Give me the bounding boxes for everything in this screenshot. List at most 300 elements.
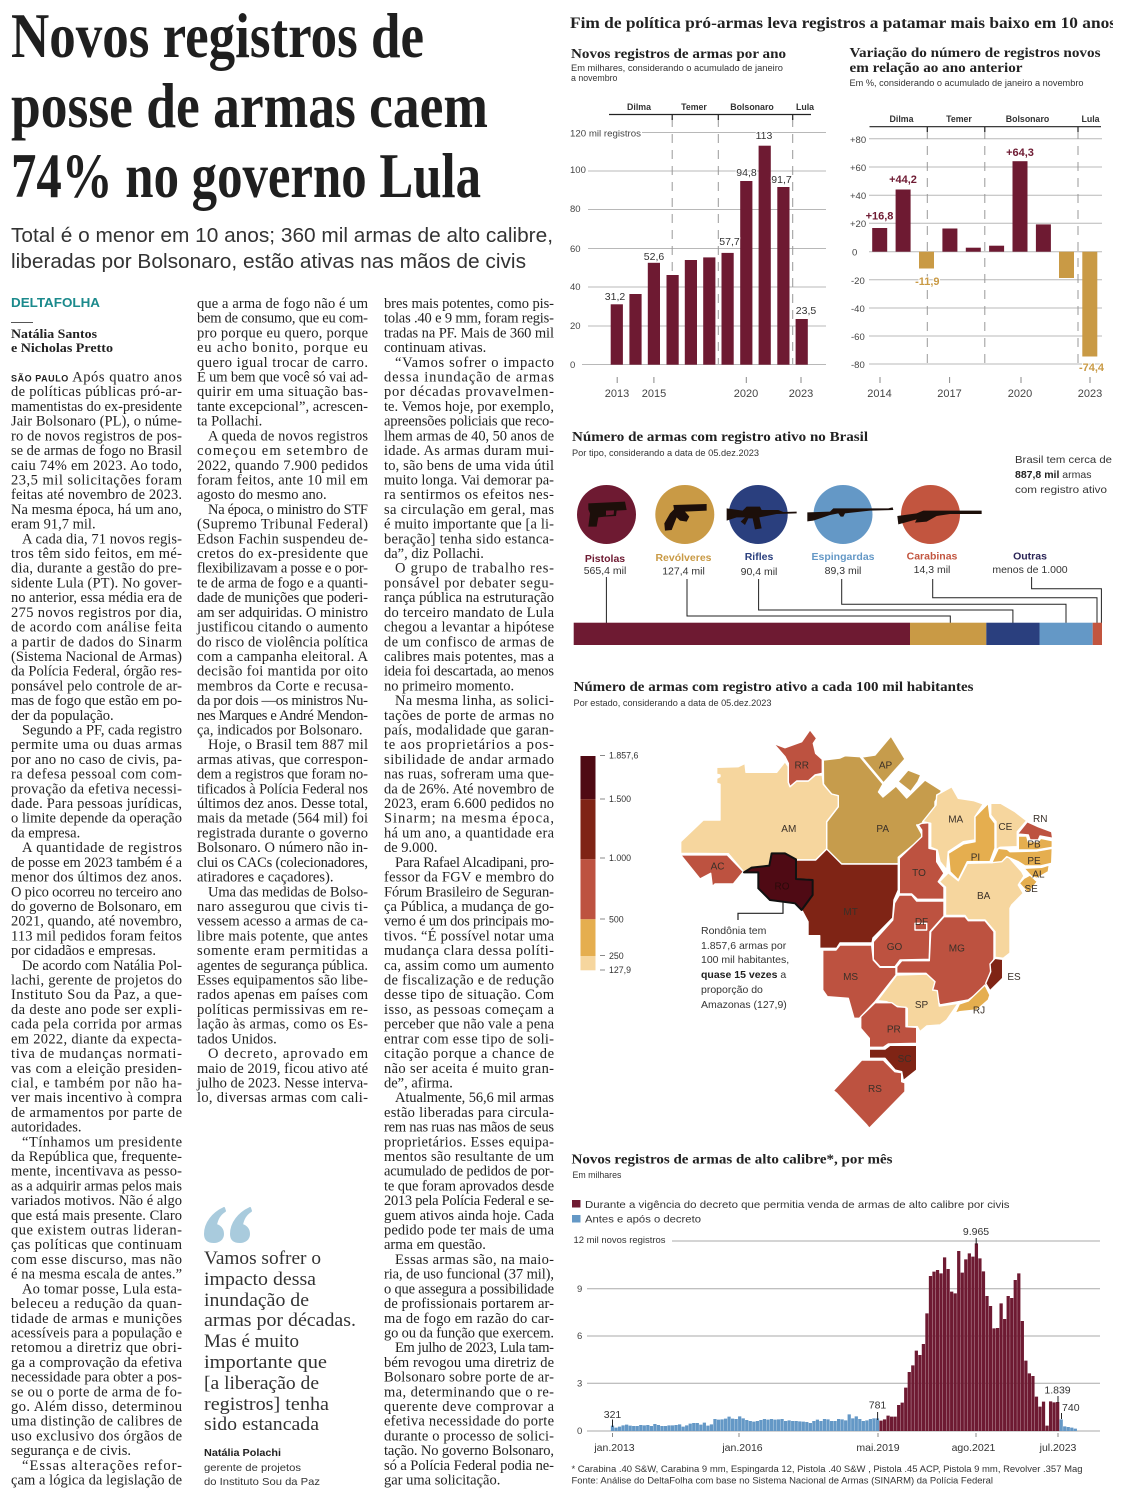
chart: yearly variation: -60 bbox=[851, 332, 865, 343]
article text: column 3: proprietários. Esses equipa- bbox=[384, 1134, 554, 1150]
article text: column 1: der da população. bbox=[11, 708, 114, 724]
panel: high-caliber registrations per month: 3 bbox=[577, 1378, 582, 1390]
article text: column 2: Esses equipamentos são libe- bbox=[197, 972, 368, 988]
article text: column 2: ça, indicados por Bolsonaro. bbox=[197, 722, 363, 738]
article text: column 1: que existem outras lideran- bbox=[11, 1222, 182, 1238]
article text: column 1: retomou a diretriz que obri- bbox=[11, 1340, 182, 1356]
legend bbox=[572, 1199, 1010, 1226]
bars: yearly registrations bbox=[611, 146, 808, 365]
article text: column 1: mas de fogo que estão em po- bbox=[11, 693, 182, 709]
icon: rifle bbox=[727, 485, 797, 544]
state labels: AP bbox=[879, 760, 892, 772]
article text: column 3: O grupo de trabalho res- bbox=[395, 561, 554, 577]
article text: column 2: bem de consumo, que eu com- bbox=[197, 311, 368, 327]
state labels: BA bbox=[977, 891, 991, 902]
article text: column 1: em 2022, diante da expecta- bbox=[11, 1031, 182, 1047]
callout: total guns: 887,8 mil armas bbox=[1015, 469, 1091, 481]
color scale legend: 500 bbox=[609, 914, 624, 924]
article text: column 1: por ano no caso de civis, pa- bbox=[11, 752, 182, 768]
color scale legend: 1.500 bbox=[609, 794, 631, 804]
panel: high-caliber registrations per month: 1.839 bbox=[1044, 1384, 1071, 1396]
subheadline: liberadas por Bolsonaro, estão ativas nas mãos de civis bbox=[11, 251, 526, 273]
article text: column 3: muito longa. Vai demorar pa- bbox=[384, 472, 554, 488]
article text: column 2: decisão foi mantida por oito bbox=[197, 664, 368, 680]
state: CE bbox=[991, 803, 1027, 850]
article text: column 3: isso, as pessoas começam a bbox=[384, 1002, 555, 1018]
chart: new registrations per year: 23,5 bbox=[796, 305, 816, 317]
byline bbox=[11, 322, 113, 355]
article text: column 1: sidente Lula (PT). No gover- bbox=[11, 575, 182, 591]
state: TO bbox=[899, 823, 944, 899]
article text: column 1: De acordo com Natália Pol- bbox=[22, 958, 182, 974]
panel: high-caliber registrations per month: 0 bbox=[577, 1426, 582, 1437]
panel: guns per 100k inhabitants by state: Por estado, considerando a data de 05.dez.2023 bbox=[574, 698, 772, 708]
article text: column 3: idade. As armas duram mui- bbox=[384, 443, 554, 459]
map of Brazil bbox=[681, 730, 1053, 1128]
article text: column 3: calibres mais potentes, mas a bbox=[384, 649, 555, 665]
article text: column 3: mudança clara dessa políti- bbox=[384, 943, 554, 959]
article text: column 2: 2022, quando 7.900 pedidos bbox=[197, 458, 368, 474]
article text: column 3: não ser aceita é muito gran- bbox=[384, 1061, 554, 1077]
section tag: Deltafolha: DELTAFOLHA bbox=[11, 295, 101, 310]
chart: new registrations per year: 52,6 bbox=[644, 251, 664, 263]
chart: yearly variation: Dilma bbox=[890, 114, 914, 124]
state labels: RJ bbox=[973, 1006, 985, 1016]
article text: column 2: quero igual trocar de carro. bbox=[197, 355, 368, 371]
article text: column 2: te de arma de fogo e a quanti- bbox=[197, 575, 368, 591]
article text: column 3: Atualmente, 56,6 mil armas bbox=[395, 1090, 554, 1106]
chart: yearly variation: -40 bbox=[851, 304, 865, 315]
article text: column 2: eu acho bonito, porque eu bbox=[197, 340, 368, 356]
state: RO highlighted bbox=[744, 853, 813, 910]
callout: total guns bbox=[1015, 454, 1112, 496]
article text: column 1: mamentistas do ex-presidente bbox=[11, 399, 182, 415]
chart: yearly variation: -80 bbox=[851, 360, 865, 371]
chart: new registrations per year: 2013 bbox=[605, 388, 629, 400]
article text: column 2: dem a registros que foram no- bbox=[197, 767, 368, 783]
article text: column 1: caiu 74% em 2023. Ao todo, bbox=[11, 458, 182, 474]
article text: column 1: ças políticas que continuam bbox=[11, 1237, 183, 1253]
article text: column 1: beleceu a redução da quan- bbox=[11, 1296, 182, 1312]
article text: column 3: to, são bens de uma vida útil bbox=[384, 458, 554, 474]
article text: column 3: estão liberadas para circula- bbox=[384, 1105, 554, 1121]
chart: new registrations per year: Em milhares, considerando o acumulado de janeiro bbox=[571, 63, 783, 73]
state labels: AL bbox=[1032, 870, 1045, 880]
article text: column 1: Jair Bolsonaro (PL), o núme- bbox=[11, 414, 182, 430]
article text: column 3: chegou a levantar a hipótese bbox=[384, 620, 554, 636]
chart: new registrations per year: 113 bbox=[756, 130, 773, 142]
panel: high-caliber registrations per month: Novos registros de armas de alto calibre*, por mês bbox=[572, 1152, 892, 1166]
article text: column 1: Na mesma época, há um ano, bbox=[11, 502, 182, 518]
article text: column 1: se ou o porte de arma de fo- bbox=[11, 1384, 182, 1400]
panel: high-caliber registrations per month bbox=[572, 1152, 1100, 1486]
article text: column 3: arma em questão. bbox=[384, 1237, 486, 1253]
pull quote: sido estancada bbox=[204, 1415, 319, 1435]
article text: column 1: de políticas públicas pró-ar- bbox=[11, 384, 182, 400]
state: RS bbox=[833, 1060, 905, 1128]
article text: column 1: çam a lógica da legislação de bbox=[11, 1473, 182, 1489]
article text: column 2: Uma das medidas de Bolso- bbox=[208, 884, 368, 900]
color scale legend bbox=[580, 750, 638, 975]
article text: column 1: da Polícia Federal, órgão res- bbox=[11, 664, 182, 680]
article text: column 3: gar uma solicitação. bbox=[384, 1473, 500, 1489]
state labels: AM bbox=[781, 824, 796, 835]
article text: column 2: libre mais potente, que antes bbox=[197, 928, 368, 944]
article text: column 2: tificados à Polícia Federal nos bbox=[197, 781, 368, 797]
article text: column 3: desse tipo de situação. Com bbox=[384, 987, 555, 1003]
state labels: PE bbox=[1027, 856, 1041, 867]
state labels: AC bbox=[711, 862, 725, 872]
article text: column 2: atiradores e caçadores). bbox=[197, 870, 333, 886]
article text: column 3: de profissionais portarem ar- bbox=[384, 1296, 554, 1312]
chart: yearly variation: 2020 bbox=[1008, 388, 1032, 400]
panel: active guns by type: 89,3 mil bbox=[825, 565, 861, 577]
panel: active guns by type: 90,4 mil bbox=[741, 566, 777, 578]
article text: column 3: ça Pública, a mudança de go- bbox=[384, 899, 554, 915]
article text: column 3: Em julho de 2023, Lula tam- bbox=[395, 1340, 554, 1356]
chart: new registrations per year: 91,7 bbox=[771, 174, 792, 186]
panel: high-caliber registrations per month: jan.2016 bbox=[721, 1442, 763, 1454]
color scale legend: 1.000 bbox=[609, 853, 631, 863]
article text: column 1: Segundo a PF, cada registro bbox=[22, 722, 182, 738]
article text: column 2: agosto do mesmo ano. bbox=[197, 487, 327, 503]
article text: column 2: nes Marques e André Mendon- bbox=[197, 708, 368, 724]
article text: column 2: membros da Corte e recusa- bbox=[197, 678, 368, 694]
state: DF bbox=[915, 923, 927, 930]
byline: e Nicholas Pretto bbox=[11, 340, 113, 355]
article text: column 1: acessíveis para a população e bbox=[11, 1326, 182, 1342]
article text: column 1: tiva de mudanças normati- bbox=[11, 1046, 182, 1062]
article text: column 2: do risco de violência política bbox=[197, 634, 369, 650]
state labels: CE bbox=[998, 822, 1013, 833]
article text: column 2: naro assegurou que civis ti- bbox=[197, 899, 368, 915]
icon: carbine bbox=[897, 485, 982, 544]
state: ES bbox=[986, 958, 1003, 991]
article text: column 3: te aos proprietários a pos- bbox=[384, 737, 554, 753]
state labels: MS bbox=[843, 972, 858, 983]
panel: high-caliber registrations per month: 781 bbox=[869, 1400, 886, 1412]
article text: column 1: 23,5 mil solicitações foram bbox=[11, 472, 183, 488]
chart: new registrations per year: Lula bbox=[796, 102, 814, 112]
state labels: RR bbox=[794, 760, 809, 772]
chart: yearly variation: +80 bbox=[850, 135, 866, 146]
chart: new registrations per year: Dilma bbox=[627, 102, 651, 112]
article text: column 1: 2021, quando, até novembro, bbox=[11, 914, 182, 930]
article text: column 3: querente deve comprovar a bbox=[384, 1399, 555, 1415]
chart: yearly variation: Bolsonaro bbox=[1006, 114, 1050, 124]
callout: Rondônia: Rondônia tem bbox=[701, 925, 767, 937]
main headline: Novos registros de bbox=[11, 0, 424, 71]
article text: column 2: É um bem que você só vai ad- bbox=[197, 368, 368, 386]
article text: column 2: (Supremo Tribunal Federal) bbox=[197, 517, 368, 533]
article text: column 3: nas ruas, sofreram uma que- bbox=[384, 767, 554, 783]
panel: guns per 100k inhabitants by state bbox=[574, 679, 1053, 1128]
callout: Rondônia bbox=[701, 902, 789, 1011]
chart: new registrations per year: 2020 bbox=[734, 388, 758, 400]
article text: column 1: a partir de dados do Sinarm bbox=[11, 634, 183, 650]
panel: high-caliber registrations per month: mai.2019 bbox=[856, 1442, 900, 1454]
article text: column 1: necessidade para obter a pos- bbox=[11, 1370, 182, 1386]
article text: column 1: do governo de Bolsonaro, em bbox=[11, 899, 183, 915]
article text: column 2: da por dois —os ministros Nu- bbox=[197, 693, 368, 709]
article text: column 2: Bolsonaro. O número não in- bbox=[197, 840, 368, 856]
callout: total guns: com registro ativo bbox=[1015, 484, 1107, 496]
article text: column 2: quirir em uma situação bas- bbox=[197, 384, 368, 400]
legend: Durante a vigência do decreto que permitia venda de armas de alto calibre por civis bbox=[585, 1199, 1010, 1211]
chart: new registrations per year: 40 bbox=[570, 282, 581, 293]
article text: column 3: pedido pode ter mais de uma bbox=[384, 1222, 555, 1238]
article text: column 3: de fiscalização e de redução bbox=[384, 972, 554, 988]
chart: yearly variation bbox=[850, 45, 1105, 400]
article text: column 2: cretos do ex-presidente que bbox=[197, 546, 368, 562]
island of Marajó bbox=[898, 770, 921, 792]
article text: column 2: rados apenas em países com bbox=[197, 987, 369, 1003]
state: PI bbox=[948, 803, 995, 880]
article text: column 2: com a campanha eleitoral. A bbox=[197, 649, 369, 665]
article text: column 2: tados Unidos. bbox=[197, 1031, 277, 1047]
article text: column 3: só a Polícia Federal podia ne- bbox=[384, 1458, 554, 1474]
article text: column 2: mais da metade (564 mil) foi bbox=[197, 811, 368, 827]
panel: high-caliber registrations per month: 321 bbox=[604, 1409, 621, 1421]
article text: column 1: O pico ocorreu no terceiro ano bbox=[11, 884, 182, 900]
panel: high-caliber registrations per month: 12 mil novos registros bbox=[574, 1235, 666, 1245]
callout: Rondônia: proporção do bbox=[701, 984, 763, 996]
panel: high-caliber registrations per month: 6 bbox=[577, 1331, 582, 1342]
byline: Natália Santos bbox=[11, 326, 97, 341]
article text: column 3: beração] tenha sido estanca- bbox=[384, 531, 554, 547]
state: BA bbox=[939, 857, 1024, 958]
article text: column 2: am ser adquiridas. O ministro bbox=[197, 605, 368, 621]
article text: column 2: flexibilizavam a posse e o por- bbox=[197, 561, 368, 577]
state labels: RN bbox=[1033, 814, 1047, 825]
article text: column 1: no anterior, essa média era de bbox=[11, 590, 182, 606]
main headline: 74% no governo Lula bbox=[11, 140, 481, 211]
article text: column 3: efetiva necessidade do porte bbox=[384, 1414, 554, 1430]
pull quote: inundação de bbox=[204, 1291, 309, 1311]
panel: active guns by type: Rifles bbox=[745, 551, 773, 563]
panel: active guns by type: Carabinas bbox=[907, 550, 958, 562]
panel: active guns by type: Pistolas bbox=[585, 553, 625, 565]
article text: column 1: “Essas alterações refor- bbox=[22, 1458, 182, 1474]
article text: column 1: que está mais presente. Claro bbox=[11, 1208, 182, 1224]
article text: column 3: tolas .40 e 9 mm, foram regis- bbox=[384, 311, 554, 327]
state: PR bbox=[861, 1003, 917, 1047]
article text: column 3: ra sentirmos os efeitos nes- bbox=[384, 487, 554, 503]
panel: high-caliber registrations per month: 740 bbox=[1062, 1402, 1080, 1414]
article text: column 1: ra defesa pessoal com com- bbox=[11, 767, 182, 783]
chart: new registrations per year: 2015 bbox=[642, 388, 666, 400]
article text: column 3: ponsável por debater segu- bbox=[384, 575, 554, 591]
article text: column 2: registrada durante o governo bbox=[197, 826, 368, 842]
panel: high-caliber registrations per month: jul.2023 bbox=[1039, 1442, 1077, 1454]
state: AP bbox=[862, 736, 905, 783]
pull quote: Vamos sofrer o bbox=[204, 1249, 321, 1269]
article text: column 3: citação porque a chance de bbox=[384, 1046, 554, 1062]
chart: yearly variation: 2017 bbox=[937, 388, 962, 400]
article text: column 3: bém revogou uma diretriz de bbox=[384, 1355, 554, 1371]
chart: new registrations per year: a novembro bbox=[571, 73, 618, 83]
article text: column 1: dade. Para pessoas jurídicas, bbox=[11, 796, 182, 812]
article text: column 1: se de armas de fogo no Brasil bbox=[11, 443, 182, 459]
panel: high-caliber registrations per month: jan.2013 bbox=[593, 1442, 635, 1454]
article text: column 3: guem ativos ainda hoje. Cada bbox=[384, 1208, 555, 1224]
graphics section heading: Fim de política pró-armas leva registros a patamar mais baixo em 10 anos bbox=[570, 15, 1116, 32]
state labels: MA bbox=[948, 814, 964, 826]
chart: yearly variation: +40 bbox=[850, 191, 866, 202]
chart: yearly variation: +64,3 bbox=[1006, 147, 1034, 159]
article text: column 3: do terceiro mandato de Lula bbox=[384, 605, 555, 621]
panel: active guns by type: Outras bbox=[1013, 550, 1047, 562]
state labels: SE bbox=[1025, 884, 1038, 895]
article text: column 2: Na época, o ministro do STF bbox=[208, 502, 368, 518]
article text: column 1: da República que, frequente- bbox=[11, 1149, 182, 1165]
article text: column 2: últimos dez anos. Desse total, bbox=[197, 796, 368, 812]
article text: column 3: Essas armas são, na maio- bbox=[395, 1252, 554, 1268]
chart: yearly variation: -74,4 bbox=[1079, 362, 1105, 374]
article text: column 2: justificou citando o aumento bbox=[196, 620, 368, 636]
states: AM, RR and AC bbox=[681, 730, 838, 887]
article text: column 3: é muito importante que [a li- bbox=[384, 517, 554, 533]
article text: column 1: 275 novos registros por dia, bbox=[11, 605, 182, 621]
article text: column 3: Na mesma linha, as solici- bbox=[395, 693, 554, 709]
article text: column 1: de posse em 2023 também é a bbox=[11, 855, 183, 871]
article text: column 1: ver mais incentivo à compra bbox=[11, 1090, 183, 1106]
article text: column 3: Fórum Brasileiro de Seguran- bbox=[384, 884, 554, 900]
article text: column 3: mentos são resultante de um bbox=[384, 1149, 555, 1165]
panel: active guns by type: Revólveres bbox=[655, 552, 712, 564]
article text: column 3: bres mais potentes, como pis- bbox=[384, 296, 554, 312]
state labels: PB bbox=[1027, 840, 1041, 850]
article text: column 2: vessem acesso a armas de ca- bbox=[197, 914, 368, 930]
panel: high-caliber registrations per month: 9.965 bbox=[963, 1226, 989, 1238]
state: AM bbox=[681, 762, 838, 872]
chart: yearly variation: Variação do número de registros novos bbox=[850, 45, 1100, 60]
article text: column 3: acumulado de pedidos de por- bbox=[384, 1164, 554, 1180]
state labels: DF bbox=[915, 917, 928, 928]
article text: column 3: Bolsonaro sobre porte de ar- bbox=[384, 1370, 554, 1386]
article text: column 2: agentes de segurança pública. bbox=[197, 958, 368, 974]
article text: column 1: 113 mil pedidos foram feitos bbox=[11, 928, 182, 944]
icon: pistol bbox=[577, 485, 636, 544]
article text: column 3: ideia foi descartada, ao menos bbox=[384, 664, 554, 680]
article text: column 3: 2013 pela Polícia Federal e se- bbox=[384, 1193, 554, 1209]
article text: column 2: Hoje, o Brasil tem 887 mil bbox=[208, 737, 368, 753]
state labels: ES bbox=[1007, 972, 1021, 983]
state labels: TO bbox=[912, 868, 926, 879]
article text: column 2: lação às armas, como os Es- bbox=[197, 1017, 368, 1033]
icon: quotation mark bbox=[205, 1208, 251, 1242]
article text: column 1: tidade de armas e munições bbox=[11, 1311, 182, 1327]
icon: revolver bbox=[655, 485, 714, 544]
pull quote: Natália Polachi bbox=[204, 1447, 281, 1459]
state labels: GO bbox=[887, 942, 902, 953]
panel: active guns by type: 14,3 mil bbox=[914, 564, 950, 576]
article text: column 1: cada pela corrida por armas bbox=[11, 1017, 182, 1033]
article text: column 1: uma distinção de calibres de bbox=[11, 1414, 182, 1430]
article text: column 3: sa circulação em geral, mas bbox=[384, 502, 554, 518]
article text: column 1: variados motivos. Não é algo bbox=[11, 1193, 182, 1209]
article text: column 1: eram 91,7 mil. bbox=[11, 517, 96, 533]
article text: column 1: “Tínhamos um presidente bbox=[22, 1134, 182, 1150]
bars: annual decreases bbox=[919, 252, 1097, 356]
article text: column 3: tivos. “É possível notar uma bbox=[384, 927, 555, 944]
article text: column 3: de”, afirma. bbox=[384, 1076, 453, 1092]
state: RN bbox=[1017, 822, 1053, 840]
chart: new registrations per year: 120 mil registros bbox=[570, 128, 642, 138]
chart: yearly variation: +60 bbox=[850, 163, 866, 174]
chart: yearly variation: 2023 bbox=[1078, 388, 1102, 400]
chart: yearly variation: +44,2 bbox=[889, 174, 917, 186]
panel: active guns by type: Por tipo, considerando a data de 05.dez.2023 bbox=[572, 448, 759, 458]
article text: column 1: ponsável pelo controle de ar- bbox=[11, 678, 182, 694]
state: MA bbox=[923, 787, 983, 870]
panel: active guns by type: Espingardas bbox=[811, 551, 875, 563]
panel: high-caliber registrations per month: 9 bbox=[577, 1284, 582, 1295]
state labels: SC bbox=[898, 1054, 912, 1065]
article text: column 2: Edson Fachin suspendeu de- bbox=[197, 531, 368, 547]
article text: column 3: da de 26%. Até novembro de bbox=[384, 781, 554, 797]
article text: column 3 bbox=[384, 296, 555, 1489]
pull quote bbox=[204, 1208, 356, 1488]
state labels: RO bbox=[774, 882, 790, 892]
article text: column 1: é na mesma escala de antes.” bbox=[11, 1267, 182, 1283]
chart: yearly variation: +16,8 bbox=[866, 210, 893, 222]
chart: new registrations per year: Novos registros de armas por ano bbox=[571, 46, 786, 61]
article text: column 3: entrar com esse tipo de soli- bbox=[384, 1031, 554, 1047]
bars: months outside the decree bbox=[612, 1414, 1075, 1431]
footnote and source bbox=[572, 1464, 1083, 1486]
article text: column 1: (Sistema Nacional de Armas) bbox=[11, 649, 182, 665]
article text: column 3: o que assegura a possibilidade bbox=[384, 1281, 554, 1297]
article text: column 1: permite uma ou duas armas bbox=[11, 737, 182, 753]
chart: yearly variation: Temer bbox=[946, 114, 972, 124]
legend: Antes e após o decreto bbox=[585, 1214, 701, 1226]
article text: column 1: Instituto Sou da Paz, a que- bbox=[11, 987, 182, 1003]
state: PE bbox=[992, 848, 1052, 866]
article text: column 3: por décadas provavelmen- bbox=[384, 384, 554, 400]
state: PB bbox=[1018, 836, 1052, 850]
pull quote: Mas é muito bbox=[204, 1332, 299, 1352]
article text: column 1: feitas até novembro de 2023. bbox=[11, 487, 182, 503]
chart: new registrations per year: 20 bbox=[570, 321, 581, 332]
article text: column 1: segurança e de civis. bbox=[11, 1443, 131, 1459]
state: AC bbox=[681, 855, 743, 887]
color scale legend: 127,9 bbox=[609, 965, 631, 975]
article text: column 3: tação. No governo Bolsonaro, bbox=[384, 1443, 554, 1459]
article text: column 2: foram feitos, ante 10 mil em bbox=[197, 472, 369, 488]
state: RJ bbox=[955, 985, 990, 1013]
article text: column 1: cial, e também por não ha- bbox=[11, 1076, 182, 1092]
article text: column 1: ga a comprovação da efetiva bbox=[11, 1355, 183, 1371]
article text: column 1: da deste ano pode ser expli- bbox=[11, 1002, 182, 1018]
state: RR bbox=[773, 730, 822, 787]
article text: column 3: tradas na PF. Mais de 360 mil bbox=[384, 325, 554, 341]
chart: yearly variation: Lula bbox=[1081, 114, 1100, 124]
color scale legend: 250 bbox=[609, 951, 624, 961]
chart: yearly variation: 2014 bbox=[867, 388, 892, 400]
article text: column 1: uso exclusivo dos órgãos de bbox=[11, 1428, 182, 1444]
callout: total guns: Brasil tem cerca de bbox=[1015, 454, 1112, 466]
article text: column 3: Para Rafael Alcadipani, pro- bbox=[395, 855, 554, 871]
article text: column 1: da empresa. bbox=[11, 826, 80, 842]
article text: column 3: da”, diz Pollachi. bbox=[384, 546, 484, 562]
state: AL bbox=[1024, 865, 1049, 878]
article text: column 1: lachi, gerente de projetos do bbox=[11, 972, 182, 988]
chart: new registrations per year: 57,7 bbox=[719, 236, 740, 248]
article text: column 2: somente eram permitidas a bbox=[197, 943, 369, 959]
article text: column 3: há um ano, a quantidade era bbox=[384, 826, 555, 842]
article text: column 2: clui os CACs (colecionadores, bbox=[197, 855, 368, 871]
